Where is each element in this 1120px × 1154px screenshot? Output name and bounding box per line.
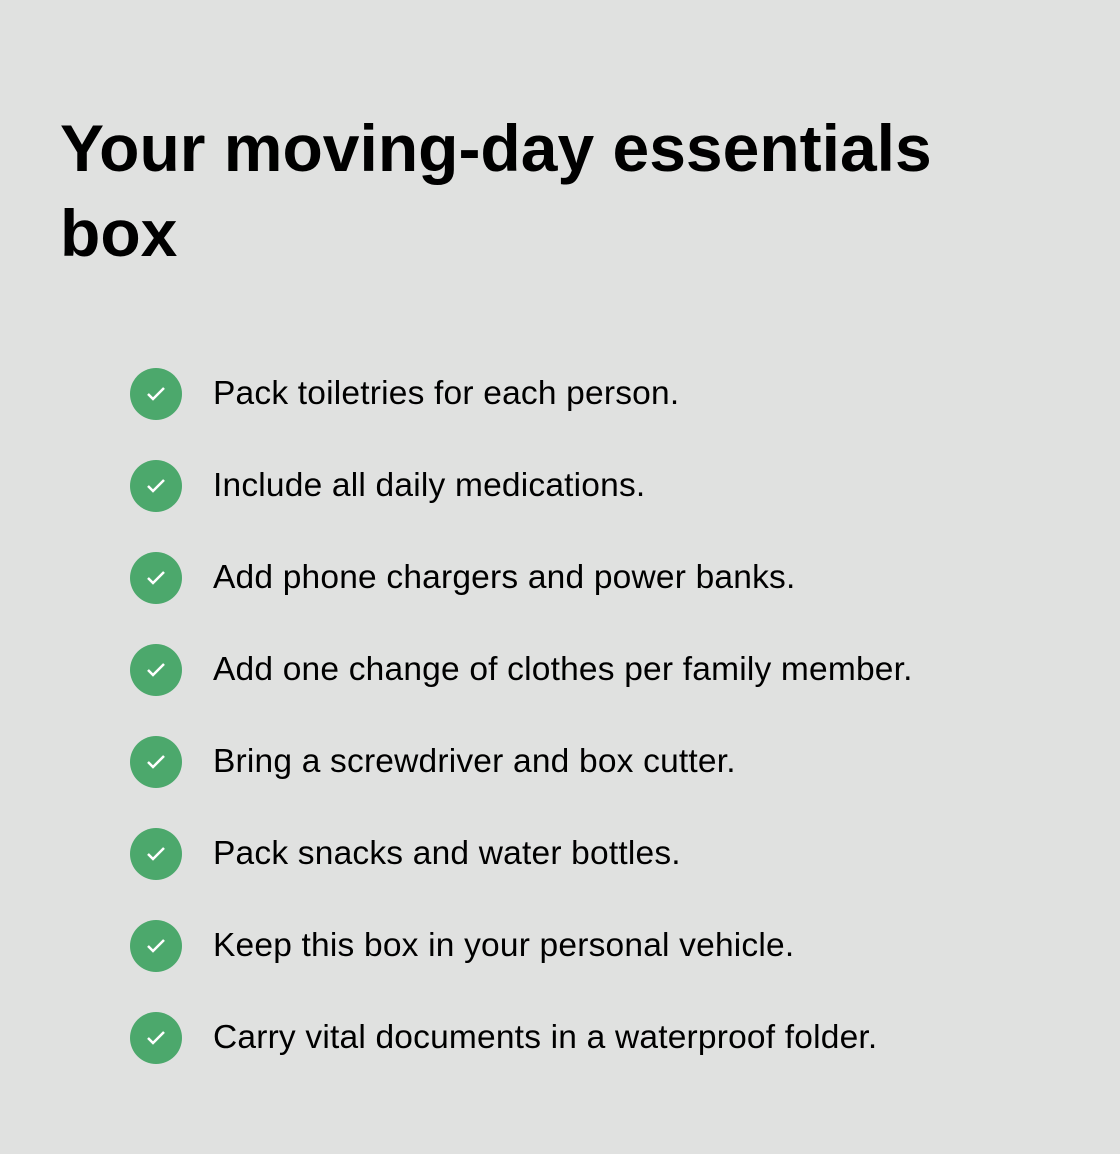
item 3 (130, 552, 795, 604)
item 6: Pack snacks and water bottles. (213, 835, 681, 872)
item 8 (130, 1012, 877, 1064)
title (60, 111, 932, 270)
item 6 (130, 828, 681, 880)
item 8: Carry vital documents in a waterproof folder. (213, 1019, 877, 1056)
item 4: Add one change of clothes per family member. (213, 651, 913, 688)
item 4 (130, 644, 913, 696)
icon: check (130, 644, 182, 696)
item 3: Add phone chargers and power banks. (213, 559, 795, 596)
item 2 (130, 460, 645, 512)
item 1 (130, 368, 679, 420)
icon: check (130, 460, 182, 512)
icon: check (130, 736, 182, 788)
icon: check (130, 368, 182, 420)
item 7: Keep this box in your personal vehicle. (213, 927, 794, 964)
item 7 (130, 920, 794, 972)
item 1: Pack toiletries for each person. (213, 375, 679, 412)
item 5 (130, 736, 736, 788)
icon: check (130, 920, 182, 972)
title: Your moving-day essentials (60, 111, 932, 185)
title: box (60, 196, 177, 270)
icon: check (130, 1012, 182, 1064)
icon: check (130, 828, 182, 880)
item 2: Include all daily medications. (213, 467, 645, 504)
item 5: Bring a screwdriver and box cutter. (213, 743, 736, 780)
icon: check (130, 552, 182, 604)
